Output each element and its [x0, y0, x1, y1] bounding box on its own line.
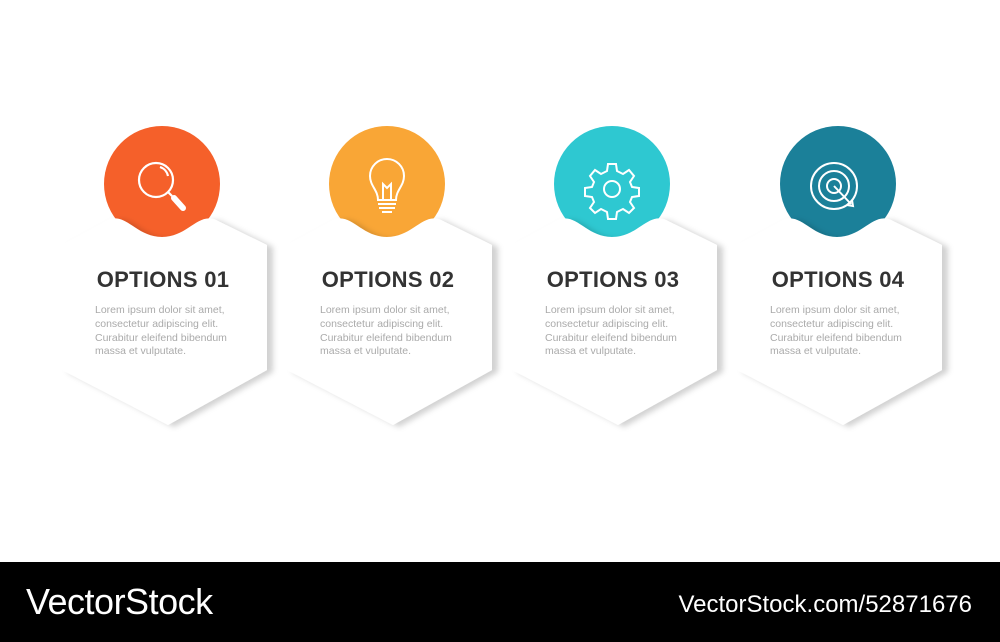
circle: cyan	[554, 126, 670, 242]
circle: orange	[104, 126, 220, 242]
circle: yellow	[329, 126, 445, 242]
footer logo: VectorStock	[26, 581, 214, 622]
footer url: VectorStock.com/52871676	[678, 591, 972, 618]
body 2: massa et vulputate.	[320, 345, 411, 357]
body 4: Curabitur eleifend bibendum	[770, 332, 902, 344]
icon: bulb	[370, 159, 404, 212]
card 2	[287, 218, 492, 425]
body 3: consectetur adipiscing elit.	[545, 318, 668, 330]
circle: teal	[780, 126, 896, 242]
card 1	[62, 218, 267, 425]
option 3	[512, 126, 717, 425]
heading 2: OPTIONS 02	[322, 267, 454, 292]
body 1: Curabitur eleifend bibendum	[95, 332, 227, 344]
body 1: massa et vulputate.	[95, 345, 186, 357]
body 3: massa et vulputate.	[545, 345, 636, 357]
body 2: Lorem ipsum dolor sit amet,	[320, 304, 450, 316]
footer bar	[0, 562, 1000, 642]
option 1	[62, 126, 267, 425]
body 4: Lorem ipsum dolor sit amet,	[770, 304, 900, 316]
body 2: consectetur adipiscing elit.	[320, 318, 443, 330]
body 2: Curabitur eleifend bibendum	[320, 332, 452, 344]
option 4	[737, 126, 942, 425]
body 3: Curabitur eleifend bibendum	[545, 332, 677, 344]
body 4: consectetur adipiscing elit.	[770, 318, 893, 330]
body 1: consectetur adipiscing elit.	[95, 318, 218, 330]
icon: target	[811, 163, 857, 209]
body 3: Lorem ipsum dolor sit amet,	[545, 304, 675, 316]
icon: gear	[585, 164, 639, 219]
card 4	[737, 218, 942, 425]
heading 4: OPTIONS 04	[772, 267, 905, 292]
icon: magnifier	[139, 163, 183, 208]
option 2	[287, 126, 492, 425]
body 4: massa et vulputate.	[770, 345, 861, 357]
card 3	[512, 218, 717, 425]
heading 3: OPTIONS 03	[547, 267, 679, 292]
body 1: Lorem ipsum dolor sit amet,	[95, 304, 225, 316]
heading 1: OPTIONS 01	[97, 267, 229, 292]
